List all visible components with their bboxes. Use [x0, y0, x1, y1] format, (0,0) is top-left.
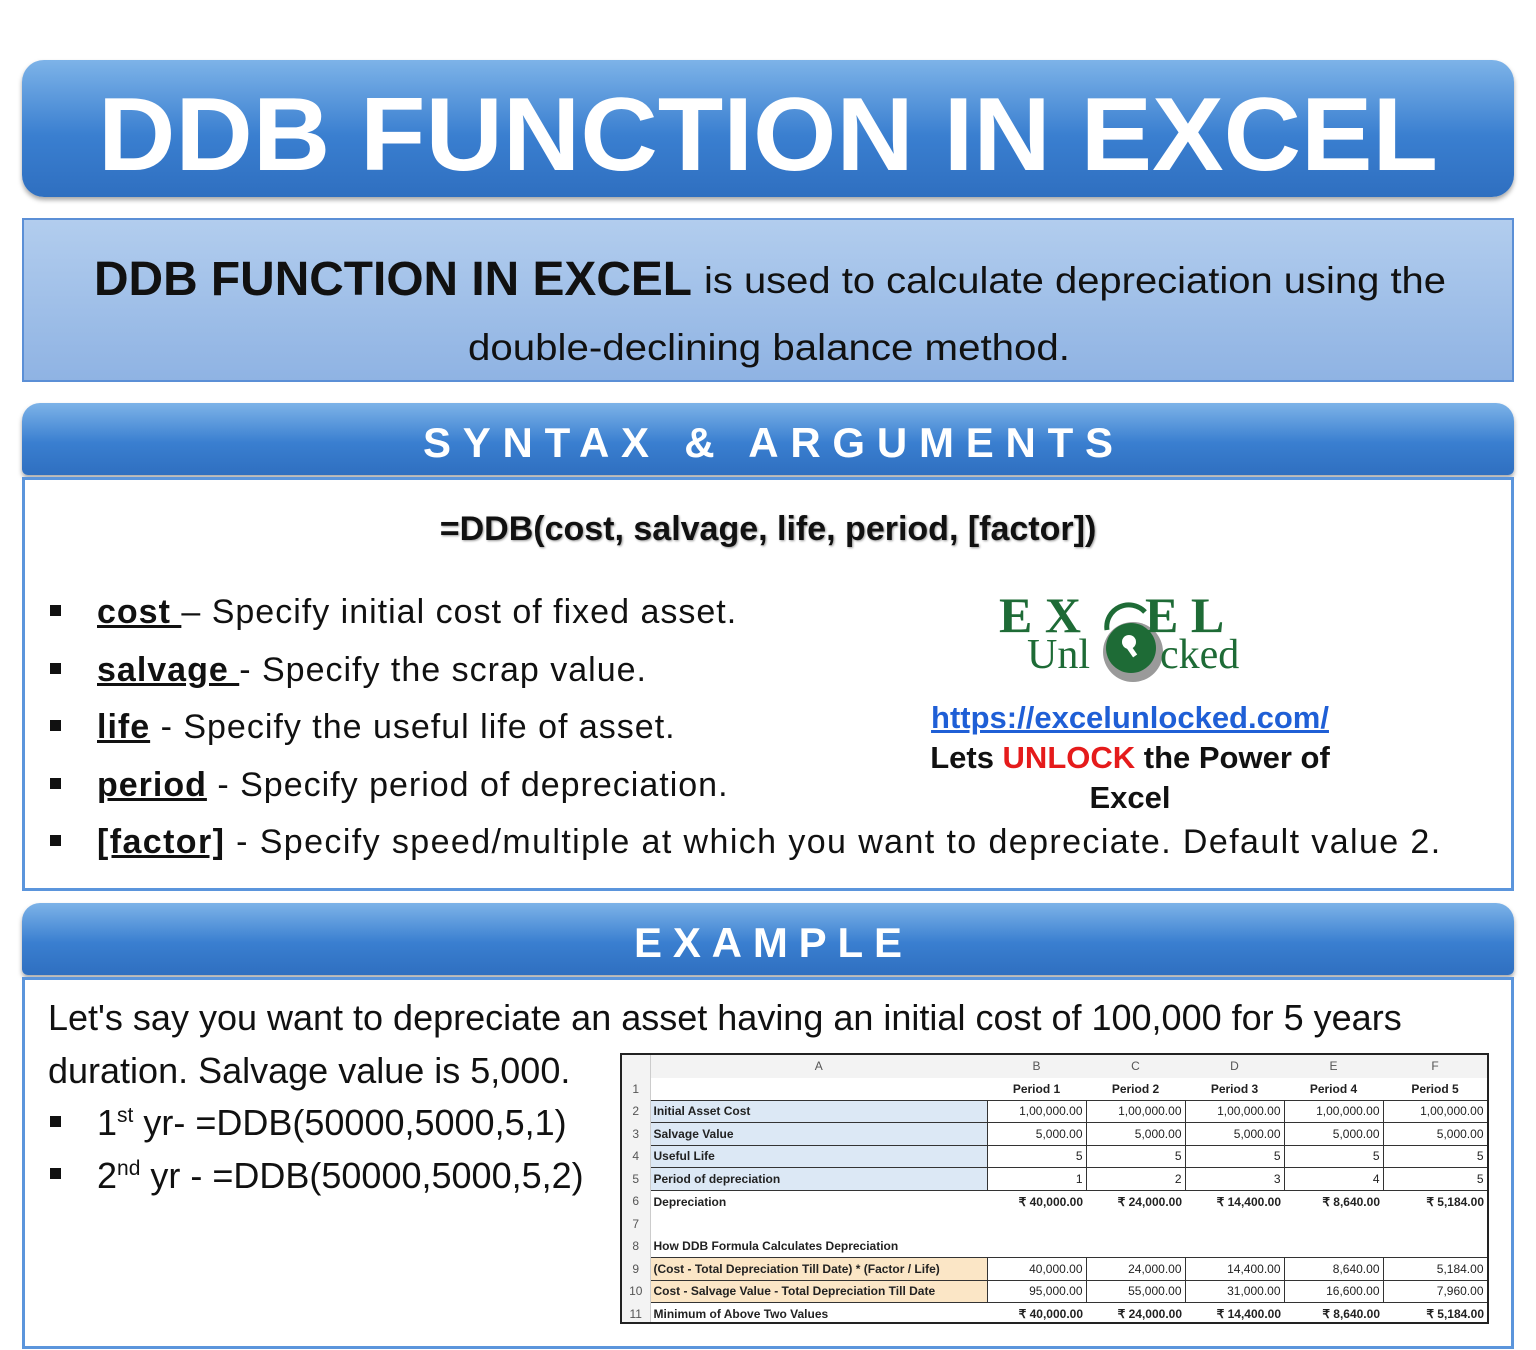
excel table: ₹ 5,184.00: [1426, 1307, 1484, 1321]
logo: excel unlocked: Unl: [1027, 632, 1090, 678]
logo: excel unlocked: E L: [1145, 587, 1224, 643]
excel table: 5: [1274, 1149, 1280, 1163]
header: syntax & arguments: [22, 403, 1514, 475]
excel table: Period 4: [1310, 1082, 1357, 1096]
excel table: 5,000.00: [1036, 1127, 1082, 1141]
excel table: 5: [1477, 1149, 1484, 1163]
excel table: ₹ 24,000.00: [1118, 1194, 1182, 1208]
excel table: 1,00,000.00: [1420, 1104, 1484, 1118]
argument list: [factor] - Specify speed/multiple at which you want to depreciate. Default value 2.: [97, 823, 1442, 861]
excel table: D: [1230, 1059, 1239, 1073]
excel table: ₹ 5,184.00: [1426, 1194, 1484, 1208]
example text: [48, 997, 1402, 1196]
example text: Let's say you want to depreciate an asset having an initial cost of 100,000 for 5 years: [48, 997, 1402, 1038]
definition box: double-declining balance method.: [468, 327, 1070, 368]
excel table: 1,00,000.00: [1217, 1104, 1280, 1118]
excel table: [620, 1053, 1489, 1324]
excel table: 7,960.00: [1437, 1284, 1484, 1298]
link and tagline: Lets UNLOCK the Power of: [930, 740, 1330, 775]
excel table: F: [1431, 1059, 1439, 1073]
excel table: Period 1: [1013, 1082, 1060, 1096]
link and tagline: https://excelunlocked.com/: [931, 700, 1329, 735]
excel table: ₹ 24,000.00: [1118, 1307, 1182, 1321]
excel table: 5,184.00: [1437, 1262, 1484, 1276]
link and tagline: Excel: [1089, 780, 1170, 815]
excel table: 5,000.00: [1234, 1127, 1280, 1141]
link and tagline: [930, 700, 1330, 815]
excel table: C: [1131, 1059, 1140, 1073]
excel table: Period 3: [1211, 1082, 1258, 1096]
definition box: DDB FUNCTION IN EXCEL: [94, 253, 692, 306]
excel table: ₹ 40,000.00: [1019, 1194, 1083, 1208]
excel table: Cost - Salvage Value - Total Depreciation Till Date: [654, 1284, 935, 1298]
title bar: DDB FUNCTION IN EXCEL: [98, 77, 1438, 193]
argument list: period - Specify period of depreciation.: [97, 766, 729, 804]
excel table: 2: [632, 1104, 639, 1118]
excel table: 31,000.00: [1227, 1284, 1280, 1298]
excel table: 1: [632, 1082, 639, 1096]
excel table: Initial Asset Cost: [654, 1104, 750, 1118]
excel table: Period of depreciation: [654, 1172, 780, 1186]
panel: syntax: [22, 477, 1514, 891]
excel table: 24,000.00: [1128, 1262, 1182, 1276]
excel table: 5,000.00: [1333, 1127, 1380, 1141]
example text: duration. Salvage value is 5,000.: [48, 1050, 570, 1090]
excel table: 1,00,000.00: [1019, 1104, 1082, 1118]
example text: 2nd yr - =DDB(50000,5000,5,2): [97, 1154, 584, 1196]
excel table: 4: [1373, 1172, 1380, 1186]
excel table: 5: [1076, 1149, 1082, 1163]
excel table: 3: [1274, 1172, 1280, 1186]
excel table: Period 5: [1411, 1082, 1459, 1096]
excel table: 55,000.00: [1128, 1284, 1182, 1298]
excel table: 16,600.00: [1326, 1284, 1380, 1298]
argument list: life - Specify the useful life of asset.: [97, 708, 676, 746]
excel table: B: [1032, 1059, 1040, 1073]
excel table: Minimum of Above Two Values: [654, 1307, 828, 1321]
excel table: 40,000.00: [1029, 1262, 1082, 1276]
excel table: A: [815, 1059, 823, 1073]
logo: excel unlocked: E X: [999, 587, 1081, 643]
excel table: 5,000.00: [1437, 1127, 1484, 1141]
header: example: EXAMPLE: [634, 919, 902, 966]
excel table: ₹ 8,640.00: [1322, 1194, 1380, 1208]
excel table: 4: [632, 1149, 639, 1163]
excel table: ₹ 14,400.00: [1217, 1194, 1281, 1208]
excel table: 5: [632, 1172, 639, 1186]
excel table: 11: [630, 1307, 642, 1321]
logo: excel unlocked: cked: [1160, 632, 1239, 678]
excel table: E: [1329, 1059, 1338, 1073]
excel table: 5,000.00: [1135, 1127, 1182, 1141]
excel table: 6: [632, 1194, 639, 1208]
excel table: Useful Life: [654, 1149, 715, 1163]
excel table: How DDB Formula Calculates Depreciation: [654, 1239, 898, 1253]
panel: example: [22, 977, 1514, 1349]
example text: 1st yr- =DDB(50000,5000,5,1): [97, 1102, 567, 1143]
header: example: [22, 903, 1514, 975]
excel table: 7: [632, 1217, 639, 1231]
excel table: 1: [1076, 1172, 1082, 1186]
excel table: ₹ 8,640.00: [1322, 1307, 1380, 1321]
excel table: 10: [629, 1284, 642, 1298]
excel table: 3: [632, 1127, 639, 1141]
definition box: is used to calculate depreciation using the: [704, 260, 1446, 301]
argument list: cost – Specify initial cost of fixed asset.: [97, 593, 737, 631]
excel table: ₹ 40,000.00: [1019, 1307, 1083, 1321]
excel table: (Cost - Total Depreciation Till Date) * (Factor / Life): [654, 1262, 940, 1276]
excel table: 8,640.00: [1333, 1262, 1380, 1276]
excel table: 8: [632, 1239, 639, 1253]
excel table: ₹ 14,400.00: [1217, 1307, 1281, 1321]
argument list: salvage - Specify the scrap value.: [97, 651, 647, 689]
excel table: 5: [1373, 1149, 1380, 1163]
excel table: 14,400.00: [1227, 1262, 1280, 1276]
excel table: 5: [1175, 1149, 1182, 1163]
excel table: 95,000.00: [1029, 1284, 1082, 1298]
excel table: Depreciation: [654, 1194, 726, 1208]
excel table: 2: [1175, 1172, 1182, 1186]
excel table: 9: [632, 1262, 639, 1276]
definition box: [22, 218, 1514, 382]
syntax formula: =DDB(cost, salvage, life, period, [factor]): [440, 510, 1096, 548]
argument list: [50, 593, 1442, 861]
excel table: 1,00,000.00: [1118, 1104, 1182, 1118]
excel table: Salvage Value: [654, 1127, 734, 1141]
excel table: 5: [1477, 1172, 1484, 1186]
excel table: 1,00,000.00: [1316, 1104, 1380, 1118]
logo: excel unlocked: [999, 587, 1239, 682]
excel table: Period 2: [1112, 1082, 1159, 1096]
header: syntax & arguments: SYNTAX & ARGUMENTS: [423, 419, 1113, 466]
